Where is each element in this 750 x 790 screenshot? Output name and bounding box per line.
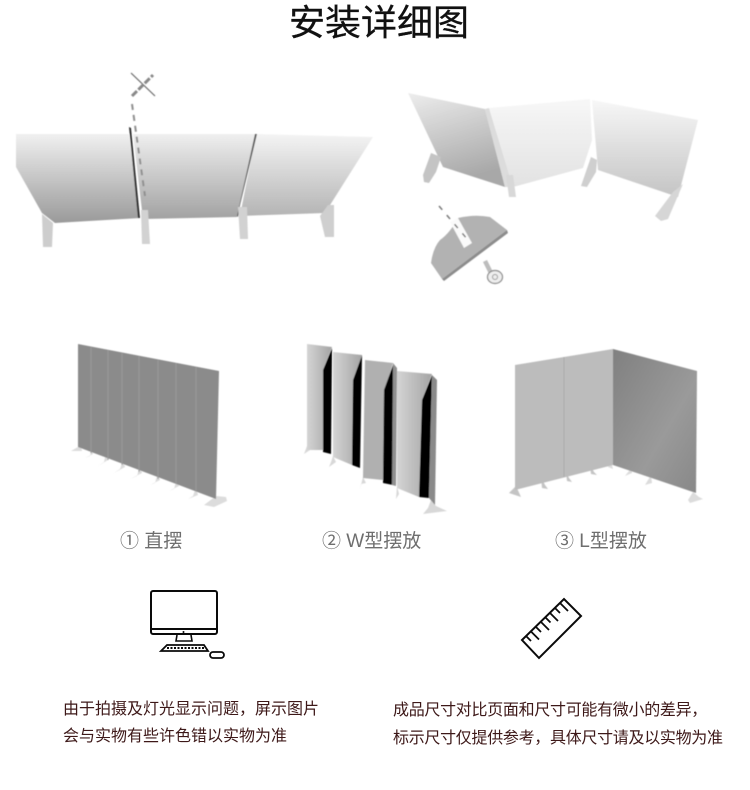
screw xyxy=(483,260,502,284)
panel edge strip xyxy=(485,108,513,187)
title: 安装详细图 xyxy=(289,2,469,43)
diagram: folded panels and bracket xyxy=(408,93,698,284)
L right wall xyxy=(613,349,697,493)
text block: size note: 标示尺寸仅提供参考，具体尺寸请及以实物为准 xyxy=(393,729,723,747)
foot 1 xyxy=(423,153,441,183)
text block: display note: 会与实物有些许色错以实物为准 xyxy=(63,727,287,745)
W black strip 2 xyxy=(352,355,362,468)
diagram: straight layout xyxy=(71,344,227,507)
seam: second joint xyxy=(237,134,257,217)
icon: ruler xyxy=(522,599,581,658)
W panel 1 xyxy=(307,344,332,450)
wall xyxy=(78,344,219,499)
dashed guide line xyxy=(132,104,145,196)
text block: display note xyxy=(63,700,319,745)
bracket detail xyxy=(431,206,508,281)
text block: size note xyxy=(393,701,723,747)
icon: desktop computer xyxy=(151,591,224,658)
panel seams xyxy=(91,347,196,491)
middle folded panel xyxy=(489,99,592,187)
right panel xyxy=(240,134,373,216)
seam: first joint xyxy=(129,127,140,218)
label: L layout: ③ L型摆放 xyxy=(555,530,647,552)
W edge strip xyxy=(429,375,437,505)
text block: size note: 成品尺寸对比页面和尺寸可能有微小的差异， xyxy=(393,701,707,719)
right folded panel xyxy=(592,100,698,197)
W black strip 4 xyxy=(419,375,432,498)
W feet xyxy=(304,446,447,514)
middle panel xyxy=(133,134,256,219)
foot 4 xyxy=(655,184,683,221)
diagram: straight panel joining xyxy=(16,73,373,247)
W black strip 1 xyxy=(323,348,332,454)
W panel 3 xyxy=(363,360,393,480)
foot 3 xyxy=(238,207,248,239)
L left wall xyxy=(515,349,613,490)
W black strip 3 xyxy=(383,365,393,485)
label: W layout: ② W型摆放 xyxy=(322,530,421,552)
L feet xyxy=(509,465,597,497)
foot 2 xyxy=(506,175,516,197)
icon: crossed out pen xyxy=(131,73,155,96)
diagram: W layout xyxy=(304,344,447,514)
W panel 4 xyxy=(397,371,432,497)
feet xyxy=(71,440,227,507)
text block: display note: 由于拍摄及灯光显示问题，屏示图片 xyxy=(63,700,319,718)
label: straight: ① 直摆 xyxy=(120,530,182,552)
foot 1 xyxy=(42,214,53,247)
foot 4 xyxy=(320,205,334,237)
foot 2 xyxy=(141,210,150,244)
foot 3 xyxy=(581,157,597,187)
diagram: L layout xyxy=(509,349,703,503)
W panel 2 xyxy=(333,352,362,465)
left folded panel xyxy=(408,93,505,187)
left panel xyxy=(16,134,140,223)
